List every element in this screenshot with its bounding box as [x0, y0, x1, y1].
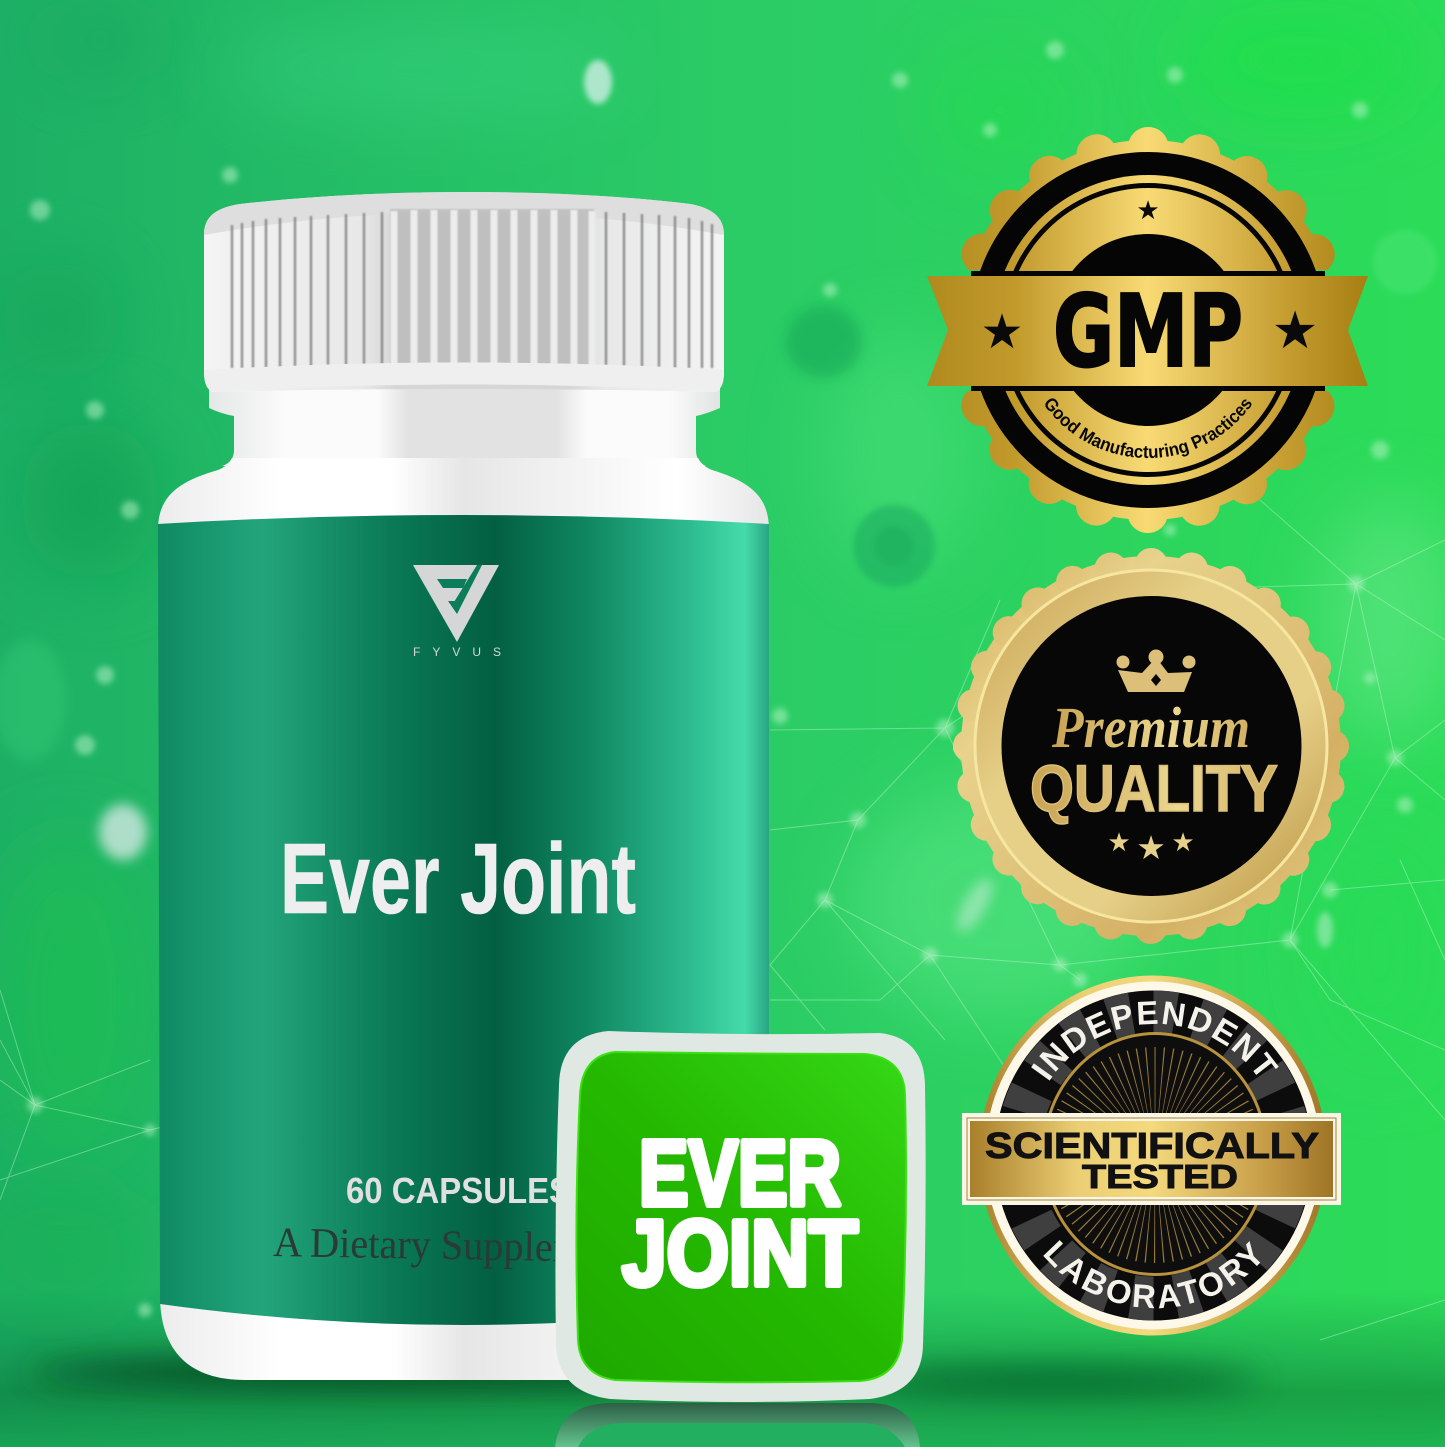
ribbon star left: ★ — [980, 304, 1024, 360]
sunburst rays — [1083, 1083, 1227, 1227]
bottle cap — [204, 192, 724, 392]
star top: ★ — [1136, 196, 1160, 226]
bottle label — [158, 515, 769, 1325]
banner line 2: TESTED — [1082, 1158, 1238, 1195]
brand square badge — [555, 1031, 926, 1402]
ring sectors — [1018, 1012, 1290, 1298]
GMP text: GMP — [1053, 273, 1243, 390]
inner green panel — [576, 1052, 906, 1382]
arc text bottom: LABORATORY — [1043, 1240, 1260, 1308]
seal rings — [970, 152, 1326, 508]
product bottle — [158, 192, 769, 1380]
black disc — [1002, 596, 1302, 896]
premium quality badge — [961, 556, 1341, 936]
ribbon star right: ★ — [1272, 301, 1318, 361]
bottle shoulder — [158, 458, 769, 530]
scalloped seal — [958, 140, 1338, 520]
three stars — [1107, 828, 1195, 867]
premium script: Premium — [1051, 695, 1250, 760]
ribbon banner — [962, 1113, 1341, 1205]
GMP badge — [927, 127, 1368, 533]
scalloped seal — [961, 556, 1341, 936]
badge wordmark line 2: JOINT — [622, 1201, 858, 1305]
brand logo: FYVUS — [413, 645, 513, 659]
banner line 1: SCIENTIFICALLY — [985, 1125, 1319, 1166]
curved tagline: Good Manufacturing Practices — [1045, 398, 1252, 458]
bottle base — [160, 1295, 769, 1380]
badge reflection — [555, 1403, 920, 1447]
capsule count: 60 CAPSULES — [346, 1170, 571, 1211]
badge wordmark: EVER — [639, 1121, 841, 1225]
three stars: ★ — [1136, 828, 1166, 867]
three stars: ★ — [1107, 828, 1131, 858]
ribbon — [927, 276, 1368, 386]
brand logo — [413, 565, 513, 659]
arc text top: INDEPENDENT — [1031, 1001, 1279, 1080]
bottle neck — [209, 385, 720, 466]
floor shadow — [30, 1356, 1260, 1394]
crown icon — [1116, 650, 1196, 692]
three stars: ★ — [1171, 828, 1195, 858]
supplement line: A Dietary Supplement — [273, 1220, 634, 1272]
scientifically tested badge — [962, 976, 1341, 1336]
quality text: QUALITY — [1030, 751, 1278, 825]
product name: Ever Joint — [280, 823, 636, 935]
seal band — [975, 570, 1327, 922]
